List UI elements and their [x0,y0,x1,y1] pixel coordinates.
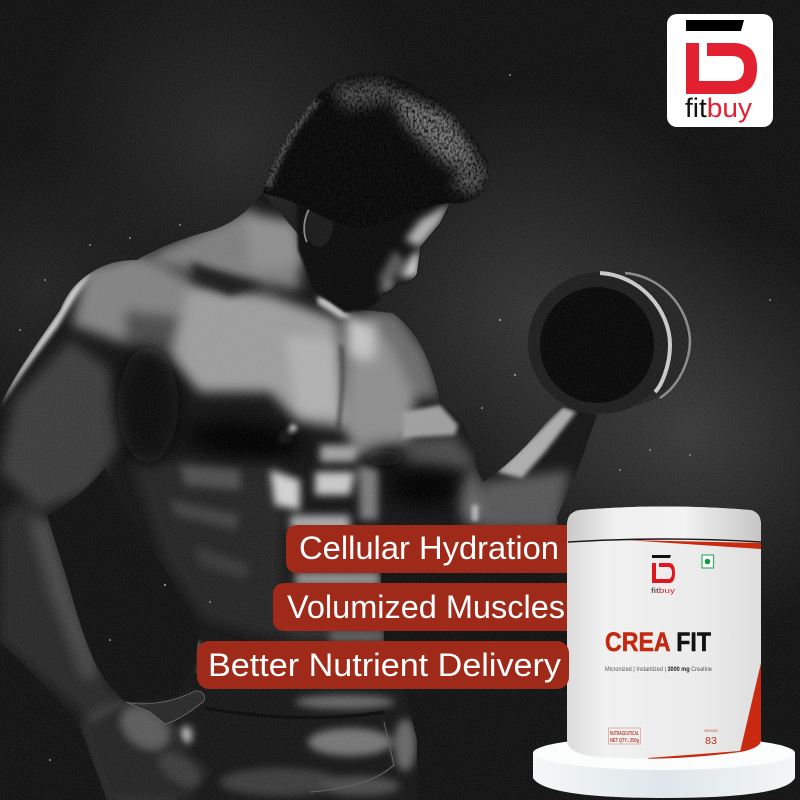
logo bar [686,20,744,31]
servings: SERVINGS [704,729,719,733]
front plate [528,272,672,414]
dumbbell [528,272,690,414]
man: head [255,65,495,312]
jar lid [567,506,761,541]
man: torso and arms [0,193,597,800]
benefit pill: Volumized Muscles [273,583,567,631]
benefit pill: Better Nutrient Delivery [197,641,569,689]
logo mark [686,43,757,94]
deep shadows [118,347,463,506]
fine details [0,272,576,672]
benefit pill: Volumized Muscles: Volumized Muscles [287,589,565,625]
ear [304,198,335,247]
left hand [88,702,207,800]
jar logo [651,555,675,595]
broad muscle shading [0,208,570,800]
servings: 83 [705,736,717,747]
brand logo [667,14,773,127]
muscle definition [170,262,385,642]
jar logo: fit buy [651,586,675,595]
fingers [126,691,205,724]
product name: CREA FIT [605,627,711,657]
hair [263,73,490,227]
platform [533,736,795,798]
logo wordmark: fitbuy [685,93,753,123]
benefit pill: Cellular Hydration: Cellular Hydration [299,530,559,566]
net quantity box: NET QTY.: 250g [610,738,639,744]
net quantity box [608,728,640,744]
product jar [567,506,761,760]
product descriptor: Micronized | Instantized | 3000 mg Creatine [605,667,713,673]
servings [704,729,719,747]
net quantity box: NUTRACEUTICAL [610,731,639,737]
jeans [177,690,417,800]
benefit pill: Better Nutrient Delivery: Better Nutrient Delivery [208,647,561,683]
face [296,190,450,312]
jar red accents [625,540,761,549]
veg mark [702,555,714,568]
benefit pill: Cellular Hydration [286,525,567,573]
back plate [554,273,690,407]
